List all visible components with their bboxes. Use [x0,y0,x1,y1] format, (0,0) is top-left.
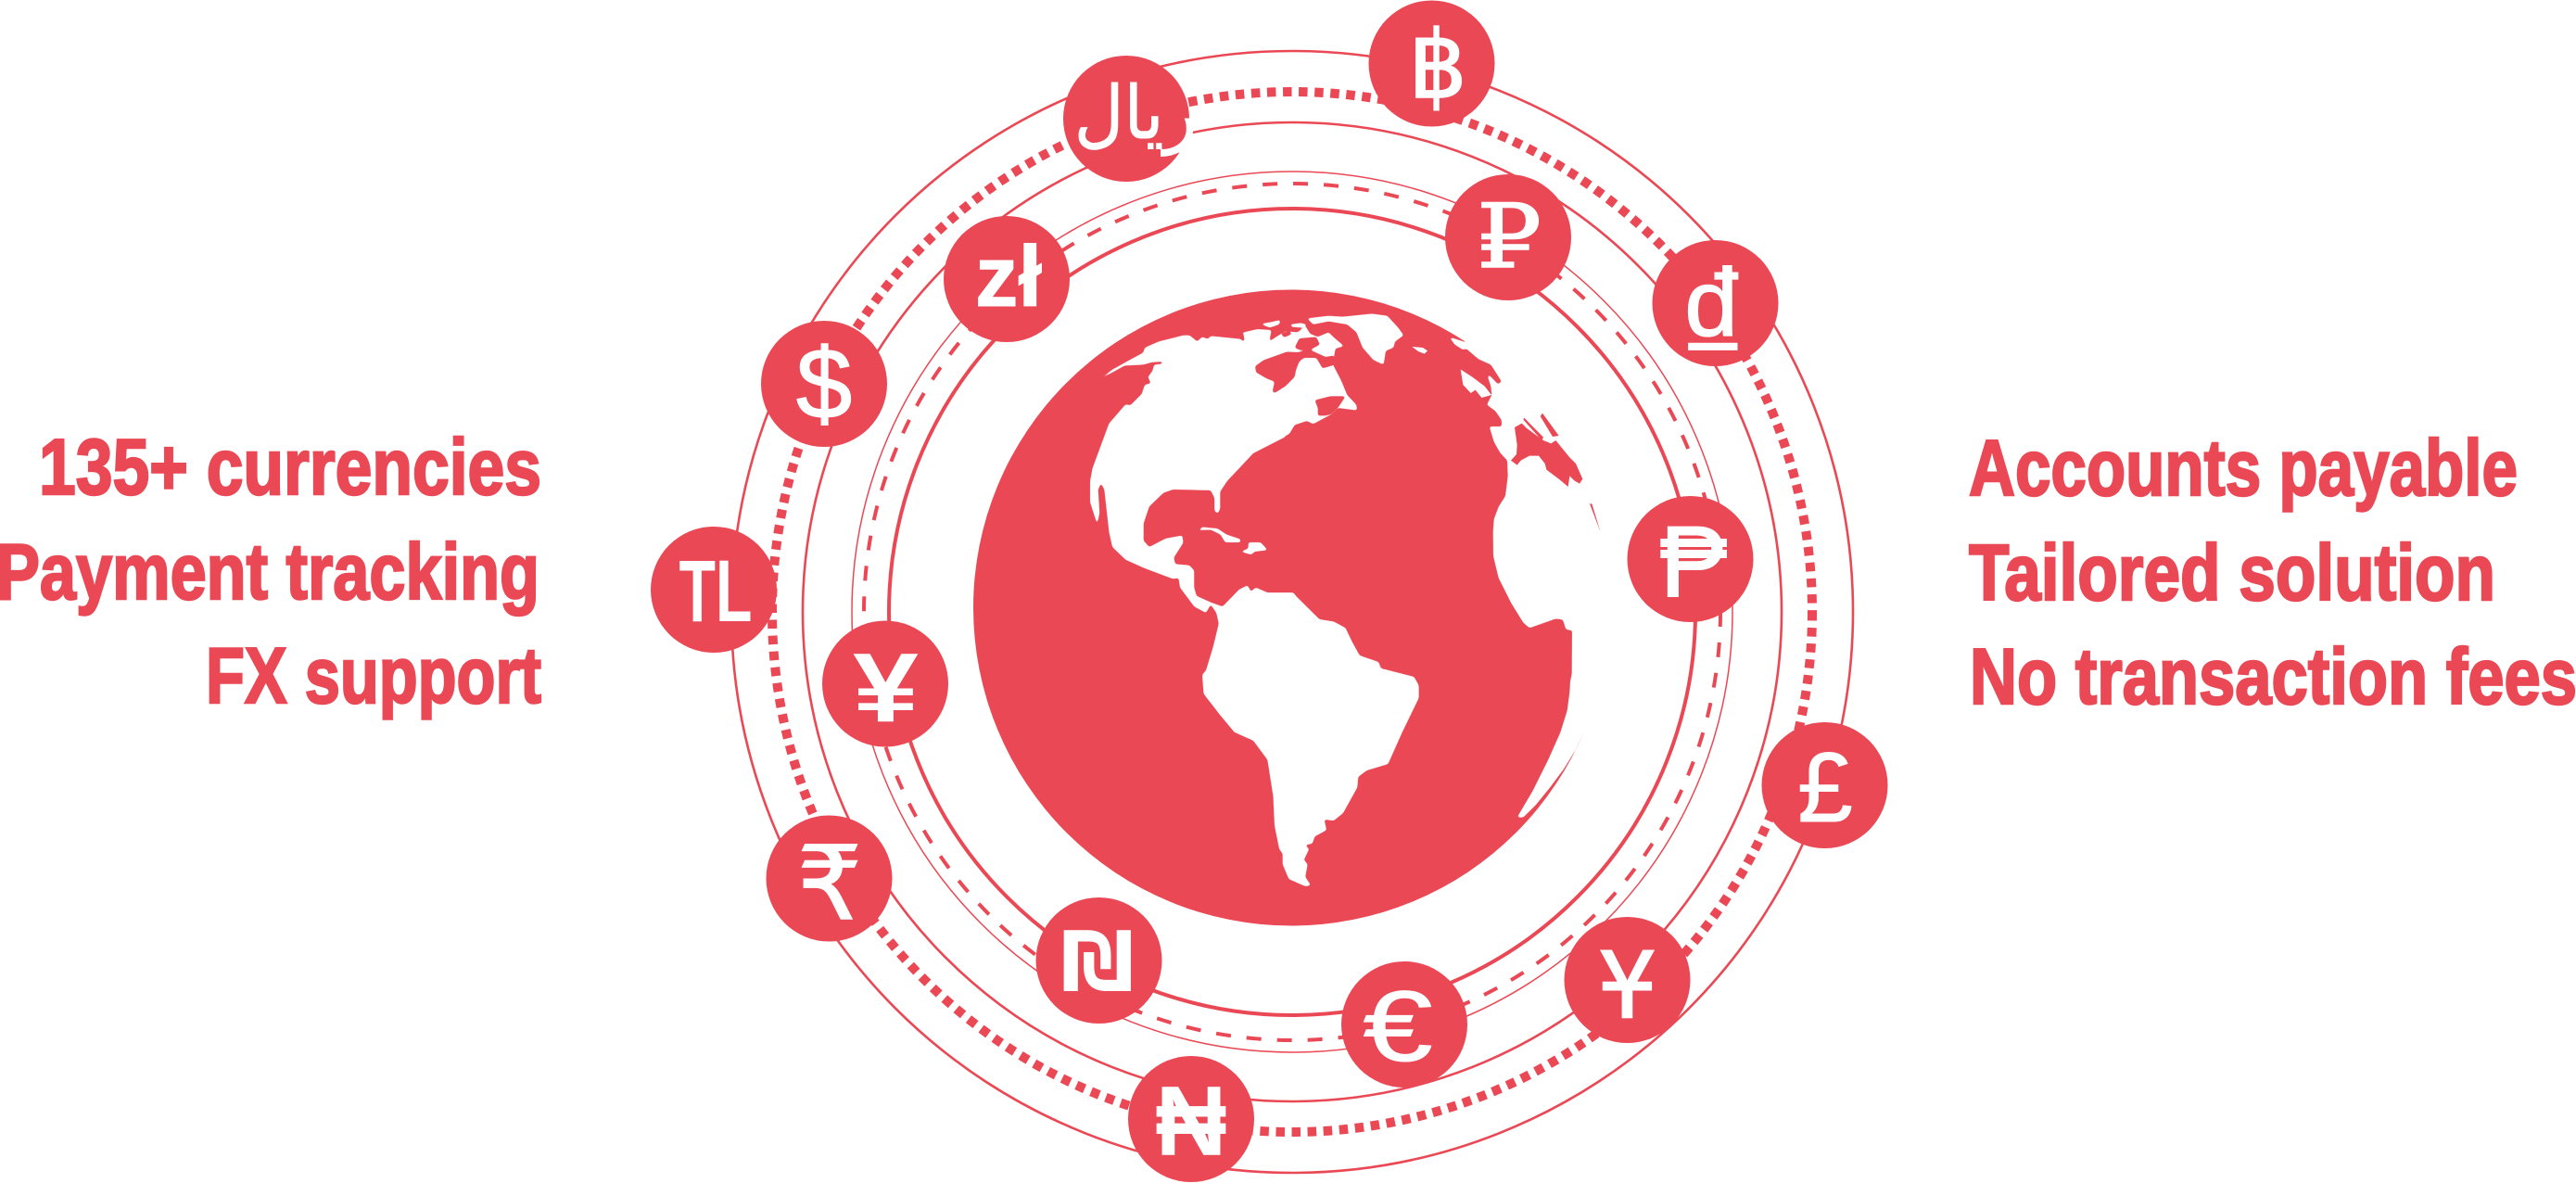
badge: pound [1761,722,1887,848]
badge: peso [1628,496,1754,622]
badge: shekel: ₪ [1060,914,1135,1010]
orbit rings [731,51,1853,1173]
badge: euro: € [1363,970,1433,1082]
badge: rupee: ₹ [797,827,862,941]
land: the Americas [1090,313,1419,886]
badge: shekel [1036,897,1162,1024]
globe disk (ocean) [973,289,1609,925]
badge: Turkish lira: TL [679,542,752,641]
badge: dong [1652,240,1778,395]
badge: baht [1368,0,1494,126]
badge: zloty [944,216,1070,342]
ocean details: Hudson Bay and Gulf of St Lawrence [1255,331,1346,415]
left feature list [0,424,541,720]
text: 135+ currencies: 135+ currencies [39,424,541,512]
badge: yen (inner): ¥ [853,632,919,743]
badge: riyal: ريال [1074,71,1197,157]
badge: dong: ₫ [1678,242,1748,395]
currency badges [651,0,1887,1182]
right feature list [1969,425,2576,721]
badge: dollar [761,321,887,447]
text: FX support: FX support [206,632,541,720]
badge: ruble: ₽ [1477,185,1542,288]
badge: pound: £ [1797,731,1853,843]
badge: baht: ฿ [1408,14,1467,118]
badge: ruble [1445,174,1571,300]
badge: Turkish lira [651,527,777,653]
badge: peso: ₱ [1660,505,1727,617]
badge: naira [1128,1056,1254,1182]
badge: yen (outer) [1565,917,1691,1043]
land: Caribbean islands [1198,527,1268,554]
badge: rupee [766,816,892,942]
badge: naira: ₦ [1155,1065,1227,1177]
land: Europe and Africa [1449,334,1622,818]
badge: yen (outer): Ұ [1601,931,1654,1038]
badge: dollar: $ [796,327,852,439]
badge: euro [1341,961,1467,1088]
badge: yen (inner) [822,621,948,747]
text: Payment tracking: Payment tracking [0,528,539,617]
globe [973,289,1622,925]
badge: riyal [1063,56,1197,182]
badge: zloty: zł [975,228,1042,324]
details: Iceland, Britain lake, Mediterranean [1412,347,1601,532]
